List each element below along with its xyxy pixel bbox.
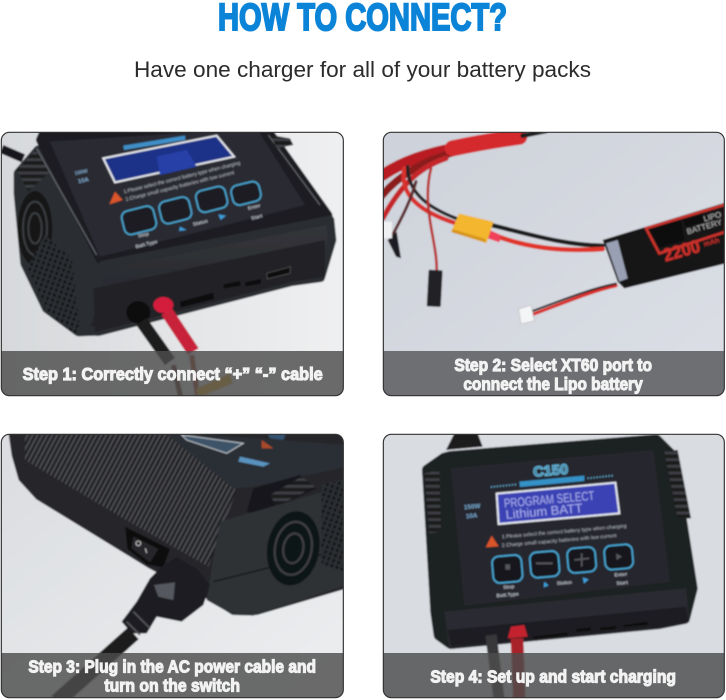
caption: step 2: connect the Lipo battery <box>463 374 643 394</box>
photo: charger front with plugged cables: Enter <box>247 203 261 212</box>
photo: charger front with LCD: 10A <box>466 512 478 520</box>
caption: step 3: turn on the switch <box>104 676 240 696</box>
photo: charger front with plugged cables: 2.Charge small capacity batteries with low current <box>125 170 235 203</box>
photo: LiPo battery with XT60 connector: BATTERY <box>686 217 724 236</box>
caption: step 1: Step 1: Correctly connect “+” “-” cable <box>23 364 323 384</box>
caption: step 2 <box>454 355 652 394</box>
photo: charger front with plugged cables: 10A <box>78 177 90 185</box>
photo: charger front with plugged cables: Batt.Type <box>135 239 158 250</box>
photo: charger front with plugged cables: Status <box>192 218 209 228</box>
photo: charger front with plugged cables: 1.Please select the correct battery type when charging <box>123 160 241 195</box>
photo: LiPo battery with XT60 connector <box>384 132 724 351</box>
photo: charger front with LCD: C150 <box>533 461 569 480</box>
caption: step 2: Step 2: Select XT60 port to <box>454 355 652 375</box>
photo: charger front with LCD: 1.Please select the correct battery type when charging <box>502 523 627 540</box>
panel: step 3 <box>0 425 347 700</box>
caption: step 4: Step 4: Set up and start charging <box>430 666 676 686</box>
photo: AC power cable and switch <box>0 425 347 700</box>
caption band <box>0 653 347 700</box>
photo: charger front with LCD: Start <box>616 580 628 587</box>
photo: charger front with plugged cables: Start <box>251 213 263 222</box>
caption: step 3: Step 3: Plug in the AC power cable and <box>28 656 316 676</box>
panel: step 4 <box>376 425 726 700</box>
caption band <box>376 653 726 700</box>
panel: step 1 <box>0 125 347 402</box>
photo: charger front with plugged cables: 150W <box>74 168 88 177</box>
caption: step 3 <box>28 656 316 696</box>
photo: charger front with plugged cables <box>0 125 347 402</box>
photo: LiPo battery with XT60 connector: 2200 <box>661 236 702 266</box>
photo: charger front with LCD: Stop <box>503 584 515 591</box>
caption band <box>376 351 726 398</box>
photo: charger front with LCD: Lithium BATT <box>505 501 584 522</box>
photo: charger front with LCD: Status <box>557 580 573 587</box>
photo: charger front with LCD <box>376 425 726 700</box>
caption band <box>0 351 347 398</box>
photo: charger front with LCD: Batt.Type <box>496 591 519 599</box>
photo: LiPo battery with XT60 connector: LIPO <box>702 210 722 224</box>
photo: charger front with LCD: 150W <box>464 503 481 511</box>
photo: charger front with LCD: 2.Charge small capacity batteries with low current <box>502 533 617 549</box>
photo: charger front with plugged cables: Stop <box>137 231 150 240</box>
panel: step 2 <box>376 125 726 398</box>
photo: LiPo battery with XT60 connector: mAh <box>702 235 721 249</box>
subtitle: Have one charger for all of your battery packs <box>134 57 591 82</box>
photo: charger front with LCD: Enter <box>614 572 628 579</box>
photo: charger front with LCD: PROGRAM SELECT <box>503 489 595 511</box>
